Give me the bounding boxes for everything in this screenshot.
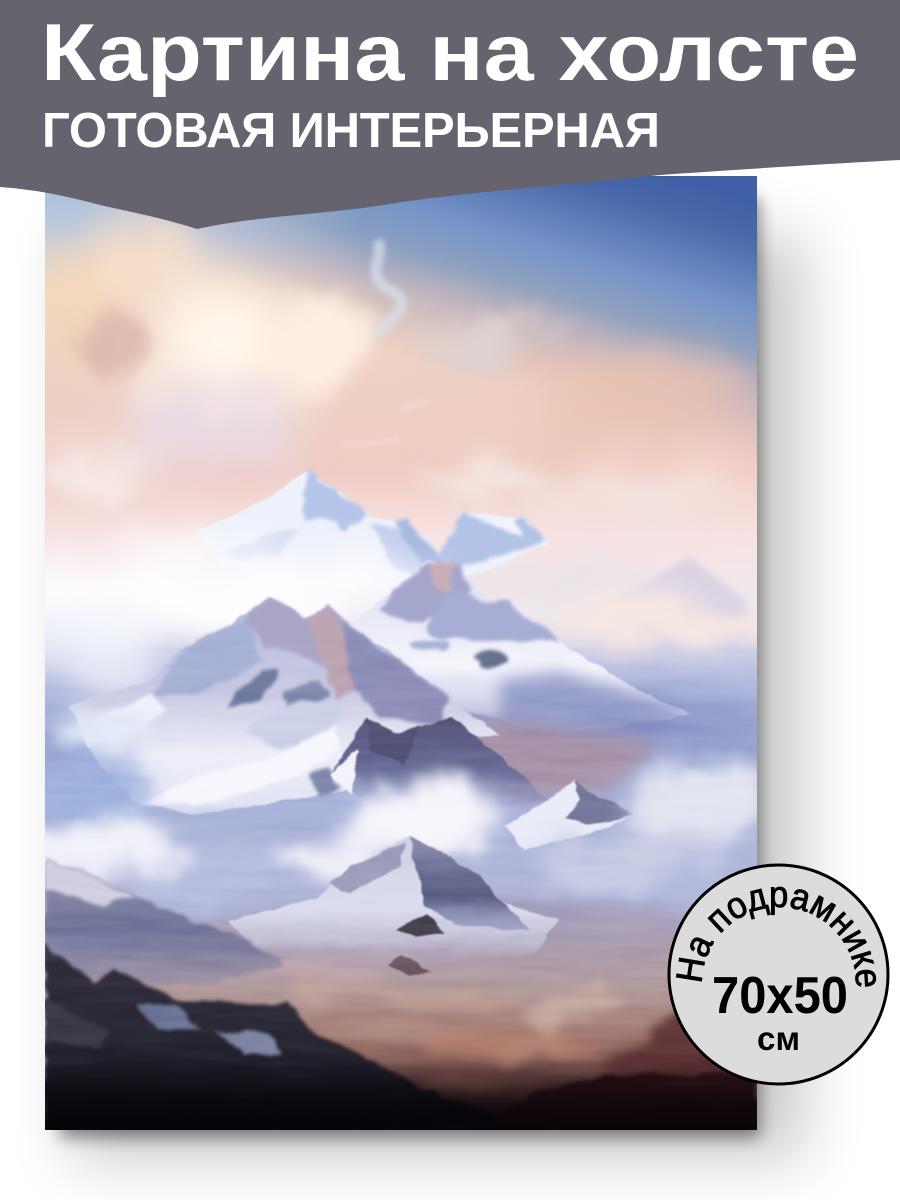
- small peak: [505, 780, 635, 850]
- distant peak: [639, 557, 748, 618]
- size: 70x50: [712, 967, 848, 1025]
- right side clouds: [549, 584, 757, 663]
- far snowy range: [195, 470, 548, 590]
- brush texture: [45, 640, 757, 1130]
- bottom vignette: [45, 1060, 757, 1130]
- title: Картина на холсте: [41, 8, 859, 98]
- middle mountain: [358, 560, 690, 728]
- canvas shadow: [60, 198, 805, 1160]
- main front mountain: [70, 597, 500, 815]
- upper clouds: [25, 210, 750, 515]
- valley behind range: [440, 715, 660, 800]
- dark ridge: [330, 717, 548, 815]
- lower peak: [229, 836, 559, 975]
- right blue haze: [628, 680, 749, 747]
- lower clouds: [15, 713, 770, 908]
- left foreground hills: [45, 860, 757, 1135]
- badge: size on stretcher: [668, 864, 890, 1086]
- cloud band: [0, 556, 430, 684]
- painting: snowy mountains: [45, 176, 757, 1130]
- header banner: [0, 0, 900, 229]
- lower terrain: [45, 895, 757, 1130]
- badge circle: [669, 865, 888, 1084]
- sky: [45, 120, 757, 1130]
- unit: см: [757, 1020, 800, 1057]
- subtitle: ГОТОВАЯ ИНТЕРЬЕРНАЯ: [42, 104, 660, 158]
- valley brush strokes: [250, 962, 757, 1092]
- curved label: На подрамнике: [676, 886, 876, 987]
